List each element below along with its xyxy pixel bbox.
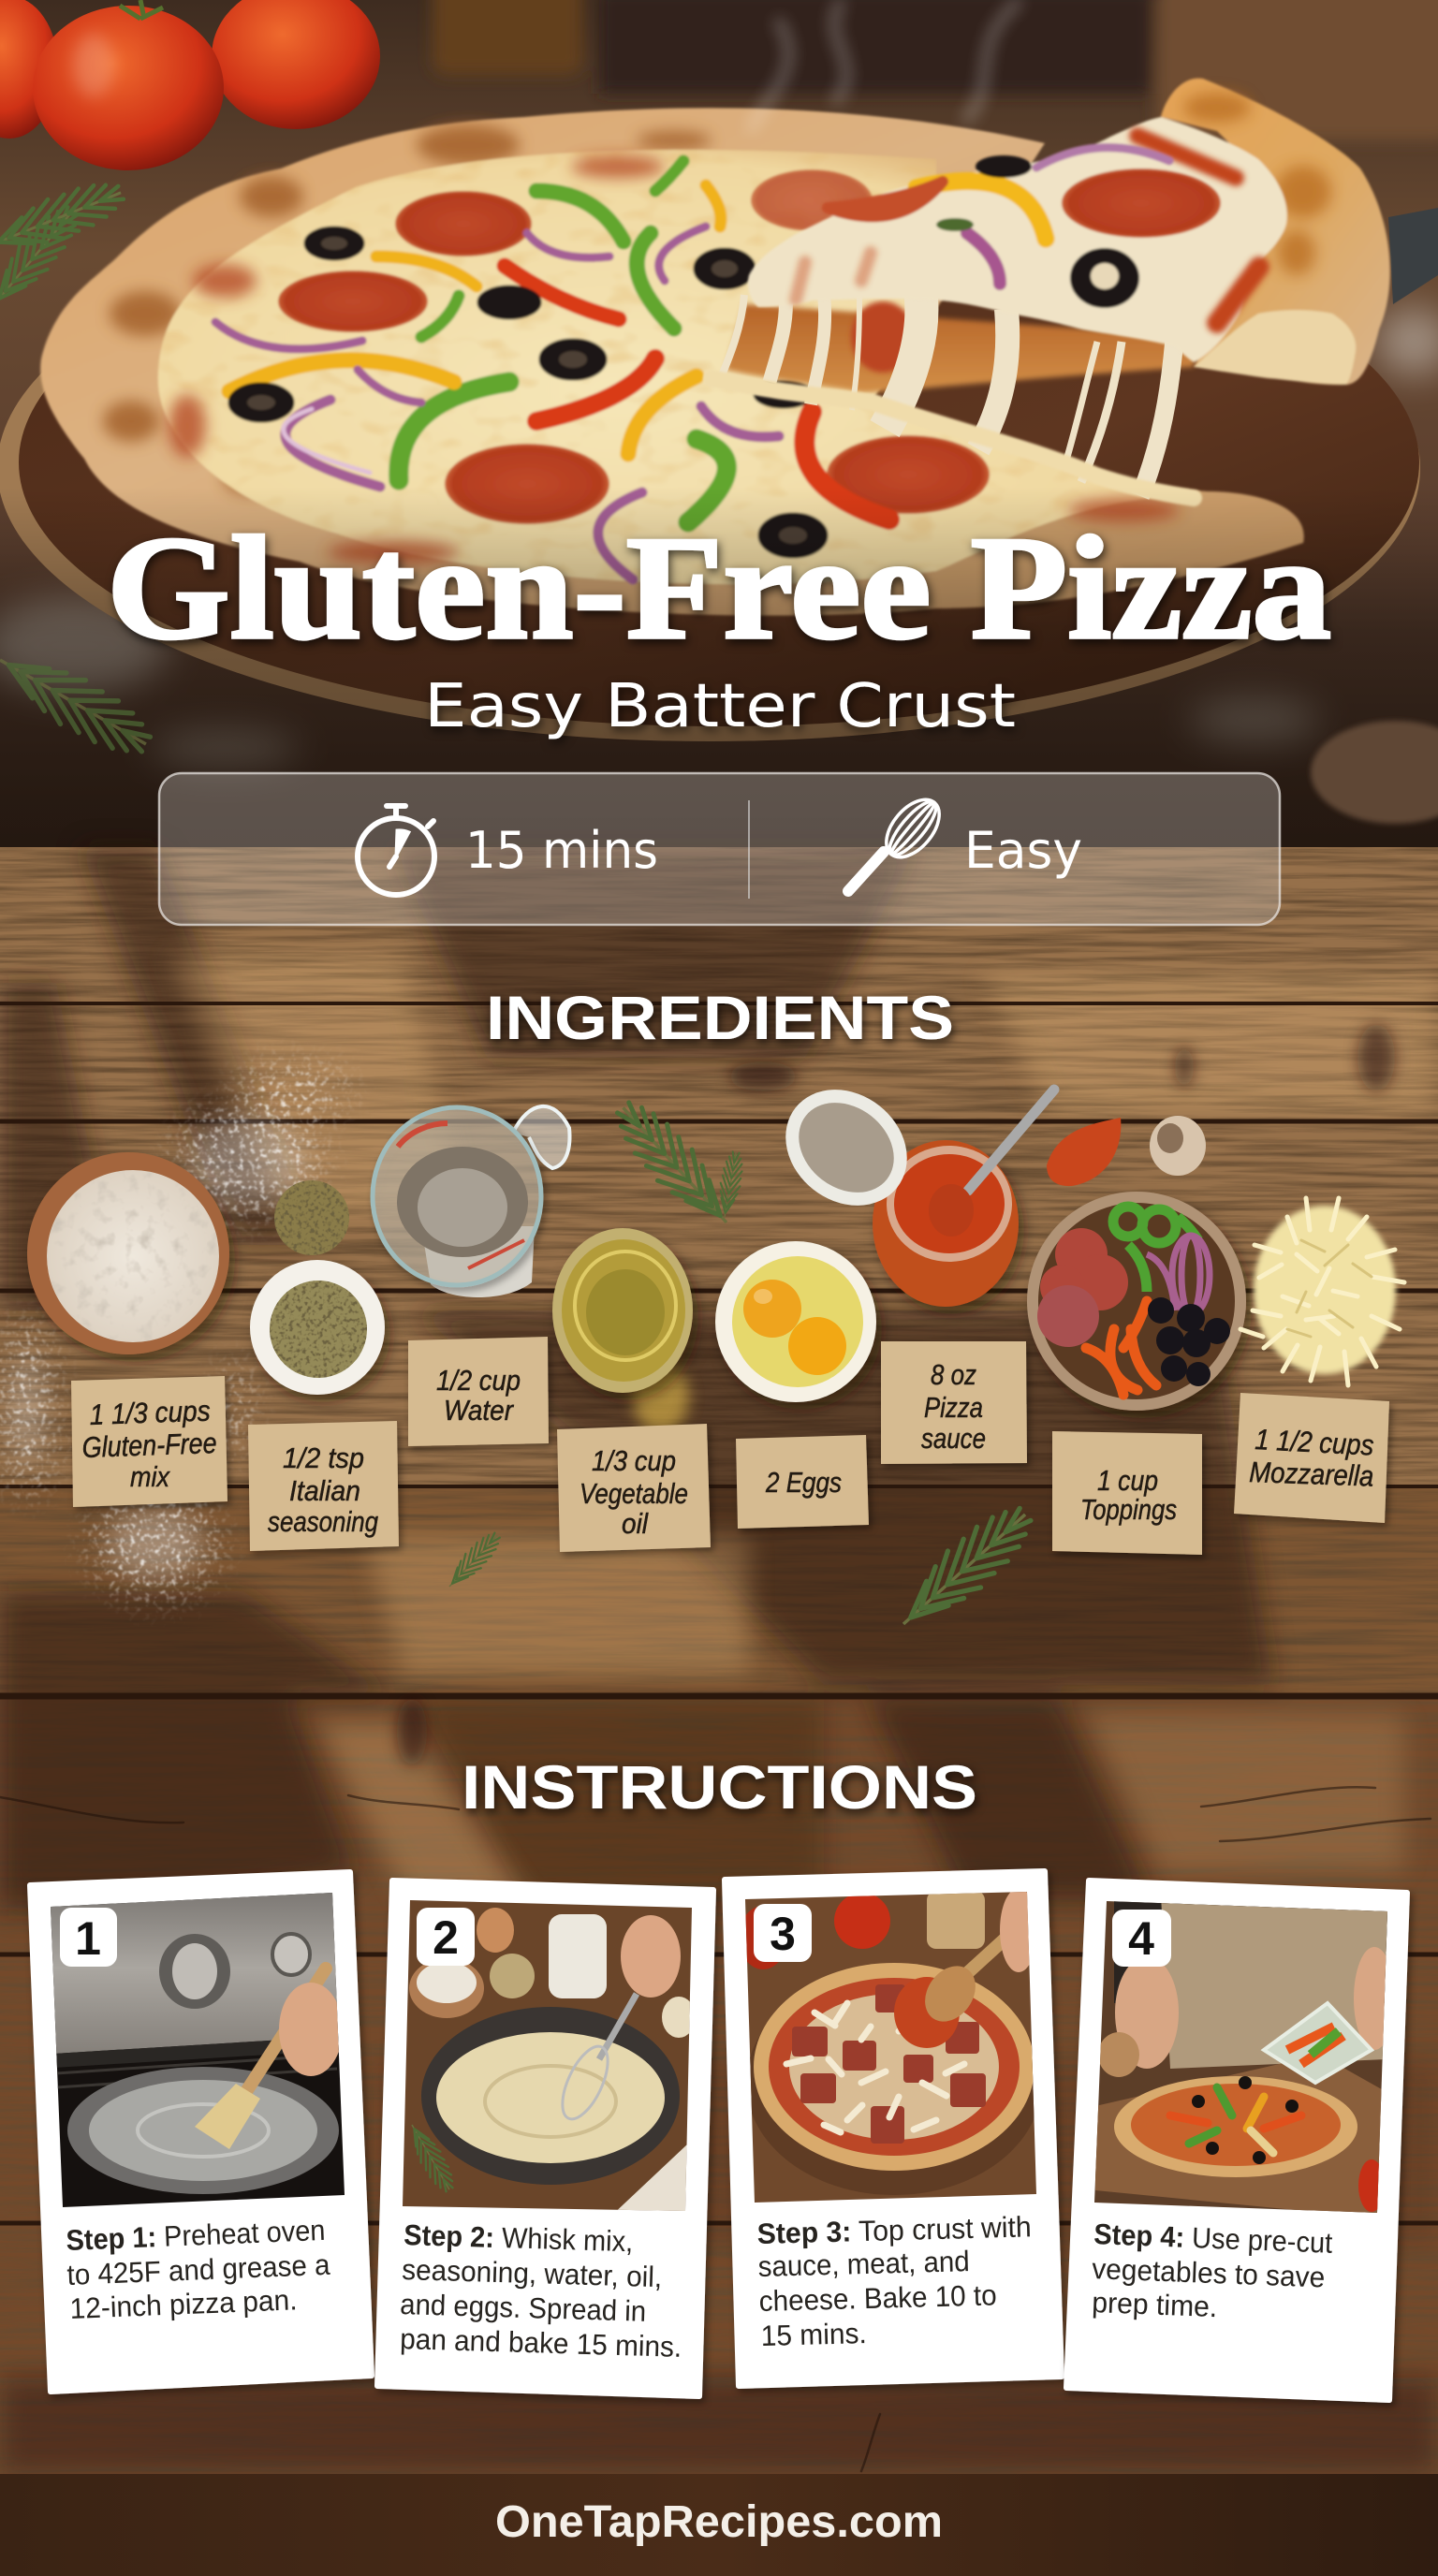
crust toasted spots [103, 124, 712, 494]
slice toppings [828, 148, 1221, 308]
title: Gluten-Free Pizza [107, 506, 1331, 670]
note: flour: 1 1/3 cups [89, 1395, 211, 1431]
note: mozzarella: 1 1/2 cups [1255, 1423, 1374, 1462]
photo: whisking batter [398, 1891, 697, 2218]
plank lines [0, 1003, 1438, 2223]
icon: stopwatch [358, 806, 434, 895]
text: difficulty: Easy [964, 821, 1082, 880]
wooden board [0, 300, 1420, 741]
pepperoni slices on pizza [278, 169, 990, 524]
number badge: 3 [770, 1908, 796, 1960]
number badge: 1 [75, 1912, 101, 1965]
cheese edge where strings join pizza [712, 378, 1194, 498]
flour dust [0, 1065, 349, 1600]
step card 2 [377, 1881, 713, 2396]
note: water: 1/2 cup [436, 1364, 521, 1397]
background table props: crock and basket [433, 0, 1438, 140]
ingredient: flour bowl [27, 1152, 229, 1354]
step text [1092, 2217, 1333, 2323]
slice crust [1161, 79, 1390, 385]
ingredient: seasoning bowl [250, 1260, 385, 1395]
step text: to 425F and grease a [66, 2248, 331, 2291]
note: mozzarella [1234, 1393, 1389, 1523]
divider [748, 800, 750, 899]
number badge: 4 [1128, 1912, 1154, 1965]
ingredient: toppings bowl [1027, 1192, 1246, 1411]
step text: Step 4: Use pre-cut [1093, 2217, 1333, 2260]
pizza cheese [158, 150, 1189, 584]
step text: pan and bake 15 mins. [400, 2322, 682, 2364]
note: mozzarella: Mozzarella [1249, 1456, 1374, 1493]
number badge [754, 1904, 812, 1962]
note: toppings: 1 cup [1097, 1464, 1158, 1497]
step text: seasoning, water, oil, [402, 2253, 663, 2293]
step text [756, 2210, 1032, 2352]
peppers on pizza [229, 161, 889, 522]
note: water [408, 1337, 549, 1446]
rosemary sprigs [442, 1092, 1042, 1643]
onion [1147, 1236, 1210, 1314]
soft dark knots [397, 1024, 1395, 1765]
olives on pizza [228, 227, 828, 558]
step text: 15 mins. [760, 2317, 867, 2352]
step text: 12-inch pizza pan. [69, 2283, 298, 2325]
rosemary lower left and roll [0, 638, 1438, 824]
heading: ingredients: INGREDIENTS [486, 983, 954, 1052]
hero photo: pizza on wooden board [0, 0, 1438, 847]
number badge: 2 [433, 1911, 459, 1964]
slice cheese [748, 117, 1287, 362]
ingredient: glass of oil [552, 1228, 693, 1433]
photo: adding vegetables [1086, 1895, 1395, 2218]
cheese strings [719, 290, 1175, 496]
step card 1 [30, 1872, 372, 2392]
number badge [417, 1908, 475, 1966]
spatula [1388, 208, 1438, 304]
note: toppings [1052, 1431, 1202, 1555]
pepperoni pieces [1037, 1228, 1128, 1347]
step text: Step 1: Preheat oven [66, 2214, 326, 2257]
sauce under slice [851, 301, 915, 373]
note: flour: mix [130, 1460, 170, 1493]
ingredient: pizza sauce jar [771, 1075, 1054, 1307]
footer website text: OneTapRecipes.com [495, 2497, 943, 2547]
step card 4 [1066, 1881, 1407, 2400]
wood table background [0, 847, 1438, 2474]
green peppers [1113, 1207, 1198, 1292]
photo: topping pizza [735, 1886, 1044, 2209]
ingredient: garlic [1150, 1116, 1206, 1176]
note: seasoning: seasoning [268, 1505, 378, 1538]
note: toppings: Toppings [1080, 1493, 1177, 1526]
note: oil: oil [622, 1507, 649, 1540]
step text: and eggs. Spread in [400, 2288, 647, 2328]
photo: oven and pan [37, 1881, 356, 2218]
orange peppers [1086, 1301, 1156, 1395]
note: oil: Vegetable [580, 1477, 688, 1510]
red onions on pizza [215, 227, 779, 579]
number badge [1112, 1910, 1171, 1967]
step text: sauce, meat, and [757, 2245, 970, 2283]
slice sauce [796, 136, 1259, 323]
step text: Step 3: Top crust with [756, 2210, 1032, 2250]
pizza crust [40, 108, 1304, 616]
pizza base group [40, 108, 1304, 616]
dark overlay behind title [0, 487, 1438, 847]
note: sauce [881, 1341, 1027, 1464]
heading: instructions: INSTRUCTIONS [462, 1752, 977, 1822]
note: oil [557, 1424, 711, 1552]
olive holes [247, 237, 807, 544]
shadow bands [0, 847, 1438, 2474]
ingredient: shredded mozzarella [1240, 1198, 1404, 1385]
note: flour [71, 1376, 227, 1507]
cheese browning [162, 152, 1067, 578]
ingredient: egg bowl [715, 1241, 876, 1402]
slice crumb [1194, 310, 1356, 385]
note: eggs [736, 1435, 869, 1529]
ingredient: loose herbs [274, 1180, 349, 1255]
flour on table [0, 308, 1438, 768]
crust browning [1183, 93, 1331, 275]
step text: vegetables to save [1092, 2252, 1326, 2294]
step card 3 [725, 1871, 1062, 2386]
footer band [0, 2474, 1438, 2576]
sauce edges [169, 155, 1180, 564]
rosemary left [0, 183, 125, 300]
lifted pizza slice [748, 79, 1390, 385]
steam [749, 0, 1020, 131]
ingredient: roasted pepper [1047, 1118, 1121, 1186]
note: sauce: sauce [921, 1422, 986, 1455]
text: time: 15 mins [465, 821, 658, 880]
step text: Step 2: Whisk mix, [404, 2218, 634, 2258]
note: flour: Gluten-Free [81, 1427, 217, 1464]
note: seasoning [248, 1421, 399, 1551]
note: water: Water [444, 1394, 515, 1427]
wood cracks and knots [0, 1787, 1431, 2471]
slice underside crust [726, 304, 1198, 393]
light bands [169, 955, 1438, 1910]
tomatoes [0, 0, 380, 170]
stats panel [159, 773, 1280, 925]
icon: whisk [848, 790, 949, 891]
step text [66, 2214, 331, 2325]
note: seasoning: 1/2 tsp [283, 1442, 364, 1474]
note: eggs: 2 Eggs [765, 1466, 842, 1499]
note: seasoning: Italian [289, 1474, 360, 1507]
note: sauce: Pizza [924, 1391, 983, 1424]
note: oil: 1/3 cup [592, 1444, 676, 1477]
step text: prep time. [1092, 2286, 1218, 2323]
ingredient: measuring cup of water [373, 1106, 569, 1297]
black olives [1148, 1297, 1230, 1386]
step text [400, 2218, 682, 2364]
subtitle: Easy Batter Crust [424, 672, 1016, 741]
number badge [60, 1908, 117, 1967]
note: sauce: 8 oz [931, 1358, 976, 1391]
step text: cheese. Bake 10 to [758, 2278, 997, 2318]
